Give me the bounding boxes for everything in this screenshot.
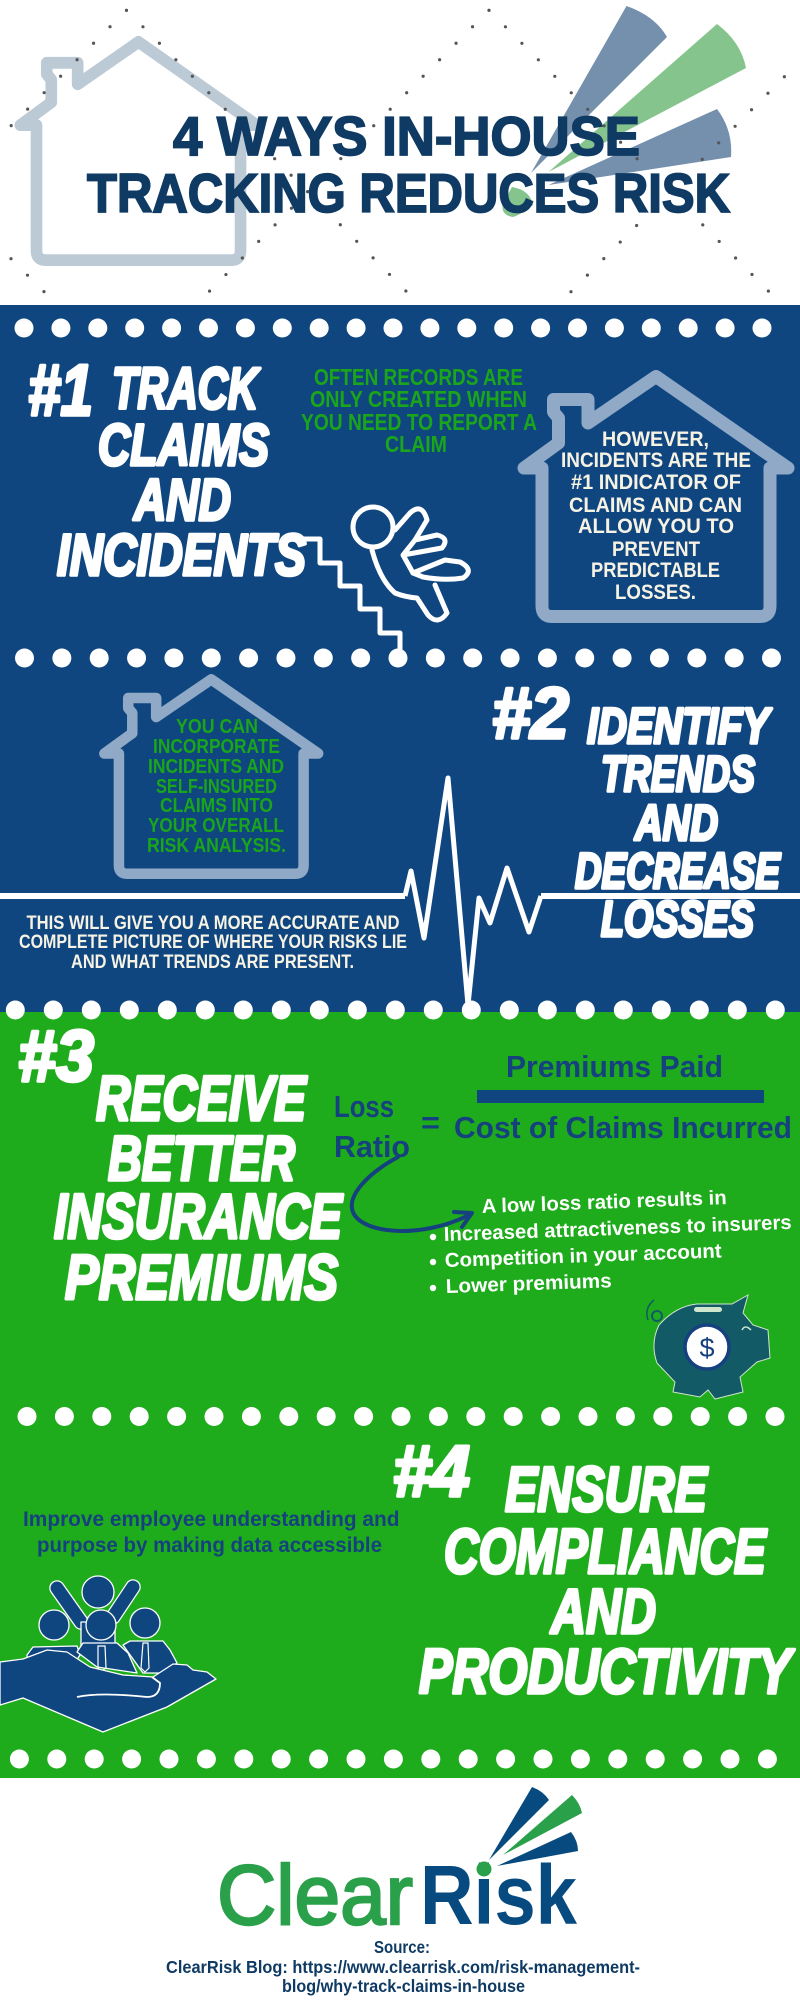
title [87,105,730,224]
logo: ClearRisk: Risk [420,1848,577,1942]
text: often records: YOU NEED TO REPORT A [301,409,537,435]
text: more accurate picture: COMPLETE PICTURE OF WHERE YOUR RISKS LIE [19,931,407,953]
icon: house with however text: PREVENT [612,538,700,561]
heading: #4 ensure compliance and productivity: ENSURE [505,1455,709,1525]
text: often records: OFTEN RECORDS ARE [314,364,523,390]
icon: house with incorporate text: YOU CAN [176,715,258,738]
stairs tail over the row [398,648,402,653]
heading: #3 receive better insurance premiums: INSURANCE [54,1182,344,1252]
icon: house with incorporate text: INCIDENTS AND [148,755,284,778]
heading: #3 receive better insurance premiums: PREMIUMS [65,1243,338,1313]
source text: blog/why-track-claims-in-house [282,1976,525,1996]
panel: #1 track claims and incidents [0,305,800,653]
list: low loss ratio benefits [430,1187,792,1298]
heading: #1 track claims and incidents [28,351,306,588]
icon: house with however text: INCIDENTS ARE THE [561,449,751,472]
icon: house with however text: LOSSES. [615,581,696,604]
arrow: loss ratio to benefits [352,1157,472,1231]
panel: #2 identify trends and decrease losses [0,648,800,1012]
text: more accurate picture: THIS WILL GIVE YOU A MORE ACCURATE AND [26,912,400,934]
icon: logo rays [502,6,746,217]
heading: #1 track claims and incidents: AND [132,468,231,533]
heading: #1 track claims and incidents: INCIDENTS [57,523,306,588]
heading: #3 receive better insurance premiums [18,1017,344,1313]
icon: house with however text: CLAIMS AND CAN [569,494,742,517]
icon: house outline [20,42,257,260]
icon: house with incorporate text: YOUR OVERALL [148,814,284,837]
formula: loss ratio: Cost of Claims Incurred [454,1110,792,1145]
list: low loss ratio benefits: Competition in your account [444,1240,722,1272]
icon: house with incorporate text: RISK ANALYSIS. [147,834,286,857]
heading: #1 track claims and incidents: TRACK [112,356,261,422]
title: 4 WAYS IN-HOUSE [173,105,640,167]
panel: #4 ensure compliance and productivity [0,1406,800,1778]
text: often records: CLAIM [385,431,447,457]
source text [166,1937,640,1996]
panel: footer [166,1787,640,1996]
icon: house with incorporate text: SELF-INSURED [156,775,277,798]
list: low loss ratio benefits: A low loss ratio results in [481,1187,727,1218]
dotted zigzag pattern [11,10,800,292]
icon: house with incorporate text [104,679,318,874]
text: improve employee understanding: Improve employee understanding and [23,1507,400,1531]
panel: #3 receive better insurance premiums [0,1010,800,1406]
heading: #2 identify trends and decrease losses [492,674,781,947]
icon: person falling down stairs [300,507,468,653]
formula: loss ratio: = [421,1105,440,1140]
panel: header [11,6,800,292]
heading: #2 identify trends and decrease losses: AND [633,795,718,851]
heading: #3 receive better insurance premiums: BETTER [108,1124,295,1194]
title: TRACKING REDUCES RISK [87,162,730,224]
source text: ClearRisk Blog: https://www.clearrisk.com/risk-management- [166,1957,640,1977]
logo: ClearRisk [217,1787,582,1942]
icon: house with however text: HOWEVER, [602,428,709,451]
heading: #2 identify trends and decrease losses: #2 [492,674,569,754]
formula: loss ratio: Ratio [334,1129,410,1164]
formula: loss ratio: Loss [334,1089,394,1124]
heading: #4 ensure compliance and productivity [393,1432,795,1707]
text: often records [301,364,537,457]
icon: house with incorporate text: INCORPORATE [153,735,280,758]
icon: piggy bank: $ [699,1333,715,1363]
logo: ClearRisk: Clear [217,1848,413,1942]
heading: #3 receive better insurance premiums: #3 [18,1017,94,1097]
heading: #1 track claims and incidents: CLAIMS [98,413,269,478]
icon: house with however text: PREDICTABLE [591,559,720,582]
formula: loss ratio: Premiums Paid [506,1049,723,1084]
heading: #4 ensure compliance and productivity: #4 [393,1432,470,1512]
source text: Source: [374,1937,430,1957]
formula: loss ratio [334,1049,792,1164]
icon: piggy bank [647,1295,770,1399]
text: improve employee understanding: purpose by making data accessible [37,1533,382,1557]
icon: house with however text: ALLOW YOU TO [578,515,734,538]
text: more accurate picture: AND WHAT TRENDS ARE PRESENT. [71,951,354,973]
heading: #4 ensure compliance and productivity: AND [549,1577,656,1647]
icon: house with however text [524,376,788,616]
text: often records: ONLY CREATED WHEN [310,386,527,412]
heading: #1 track claims and incidents: #1 [28,351,93,431]
icon: house with however text: #1 INDICATOR OF [571,471,741,494]
heading: #3 receive better insurance premiums: RECEIVE [96,1064,307,1134]
text: improve employee understanding [23,1507,400,1557]
chart: heartbeat line [0,778,800,1005]
text: more accurate picture [19,912,407,973]
heading: #2 identify trends and decrease losses: LOSSES [601,891,754,947]
icon: house with incorporate text: CLAIMS INTO [160,794,273,817]
icon: people held in a hand [0,1576,216,1732]
list: low loss ratio benefits: Lower premiums [445,1270,612,1298]
list: low loss ratio benefits: Increased attractiveness to insurers [443,1212,792,1246]
